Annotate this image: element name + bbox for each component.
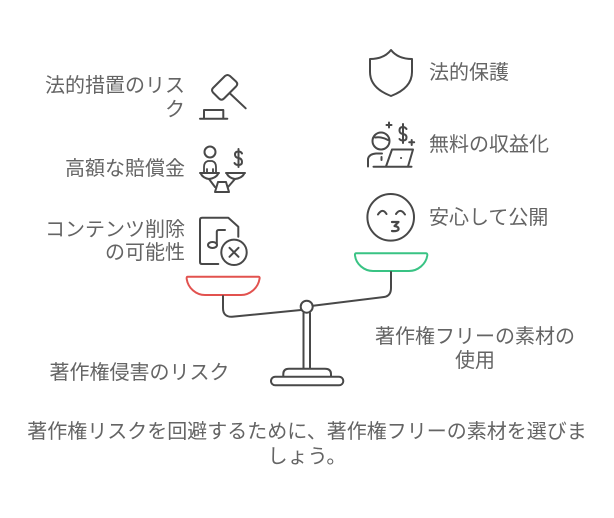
- red scale pan: [187, 277, 260, 295]
- label: free material use: 使用: [455, 349, 495, 372]
- label: content removal possibility: コンテンツ削除: [45, 219, 185, 241]
- label: legal protection: 法的保護: [429, 61, 509, 84]
- icon: gavel: [200, 75, 246, 119]
- label: content removal possibility: の可能性: [105, 241, 185, 264]
- icon: person with laptop and money: [368, 122, 414, 167]
- balance scale: [223, 272, 391, 385]
- summary caption: しょう。: [268, 446, 346, 468]
- summary caption: 著作権リスクを回避するために、著作権フリーの素材を選びま: [27, 421, 587, 443]
- label: legal action risk: 法的措置のリス: [45, 75, 185, 97]
- label: legal action risk: ク: [165, 98, 185, 121]
- label: free material use: 著作権フリーの素材の: [375, 326, 575, 348]
- icon: person and money on scale: [200, 146, 245, 192]
- icon: shield: [370, 50, 412, 96]
- icon: kissing face: [367, 194, 414, 241]
- icon: music file with cross: [200, 218, 247, 265]
- label: free monetization: 無料の収益化: [429, 133, 549, 156]
- label: copyright infringement risk: 著作権侵害のリスク: [50, 361, 230, 384]
- label: high damages: 高額な賠償金: [65, 157, 185, 180]
- green scale pan: [355, 253, 427, 271]
- label: safe publishing: 安心して公開: [429, 206, 548, 229]
